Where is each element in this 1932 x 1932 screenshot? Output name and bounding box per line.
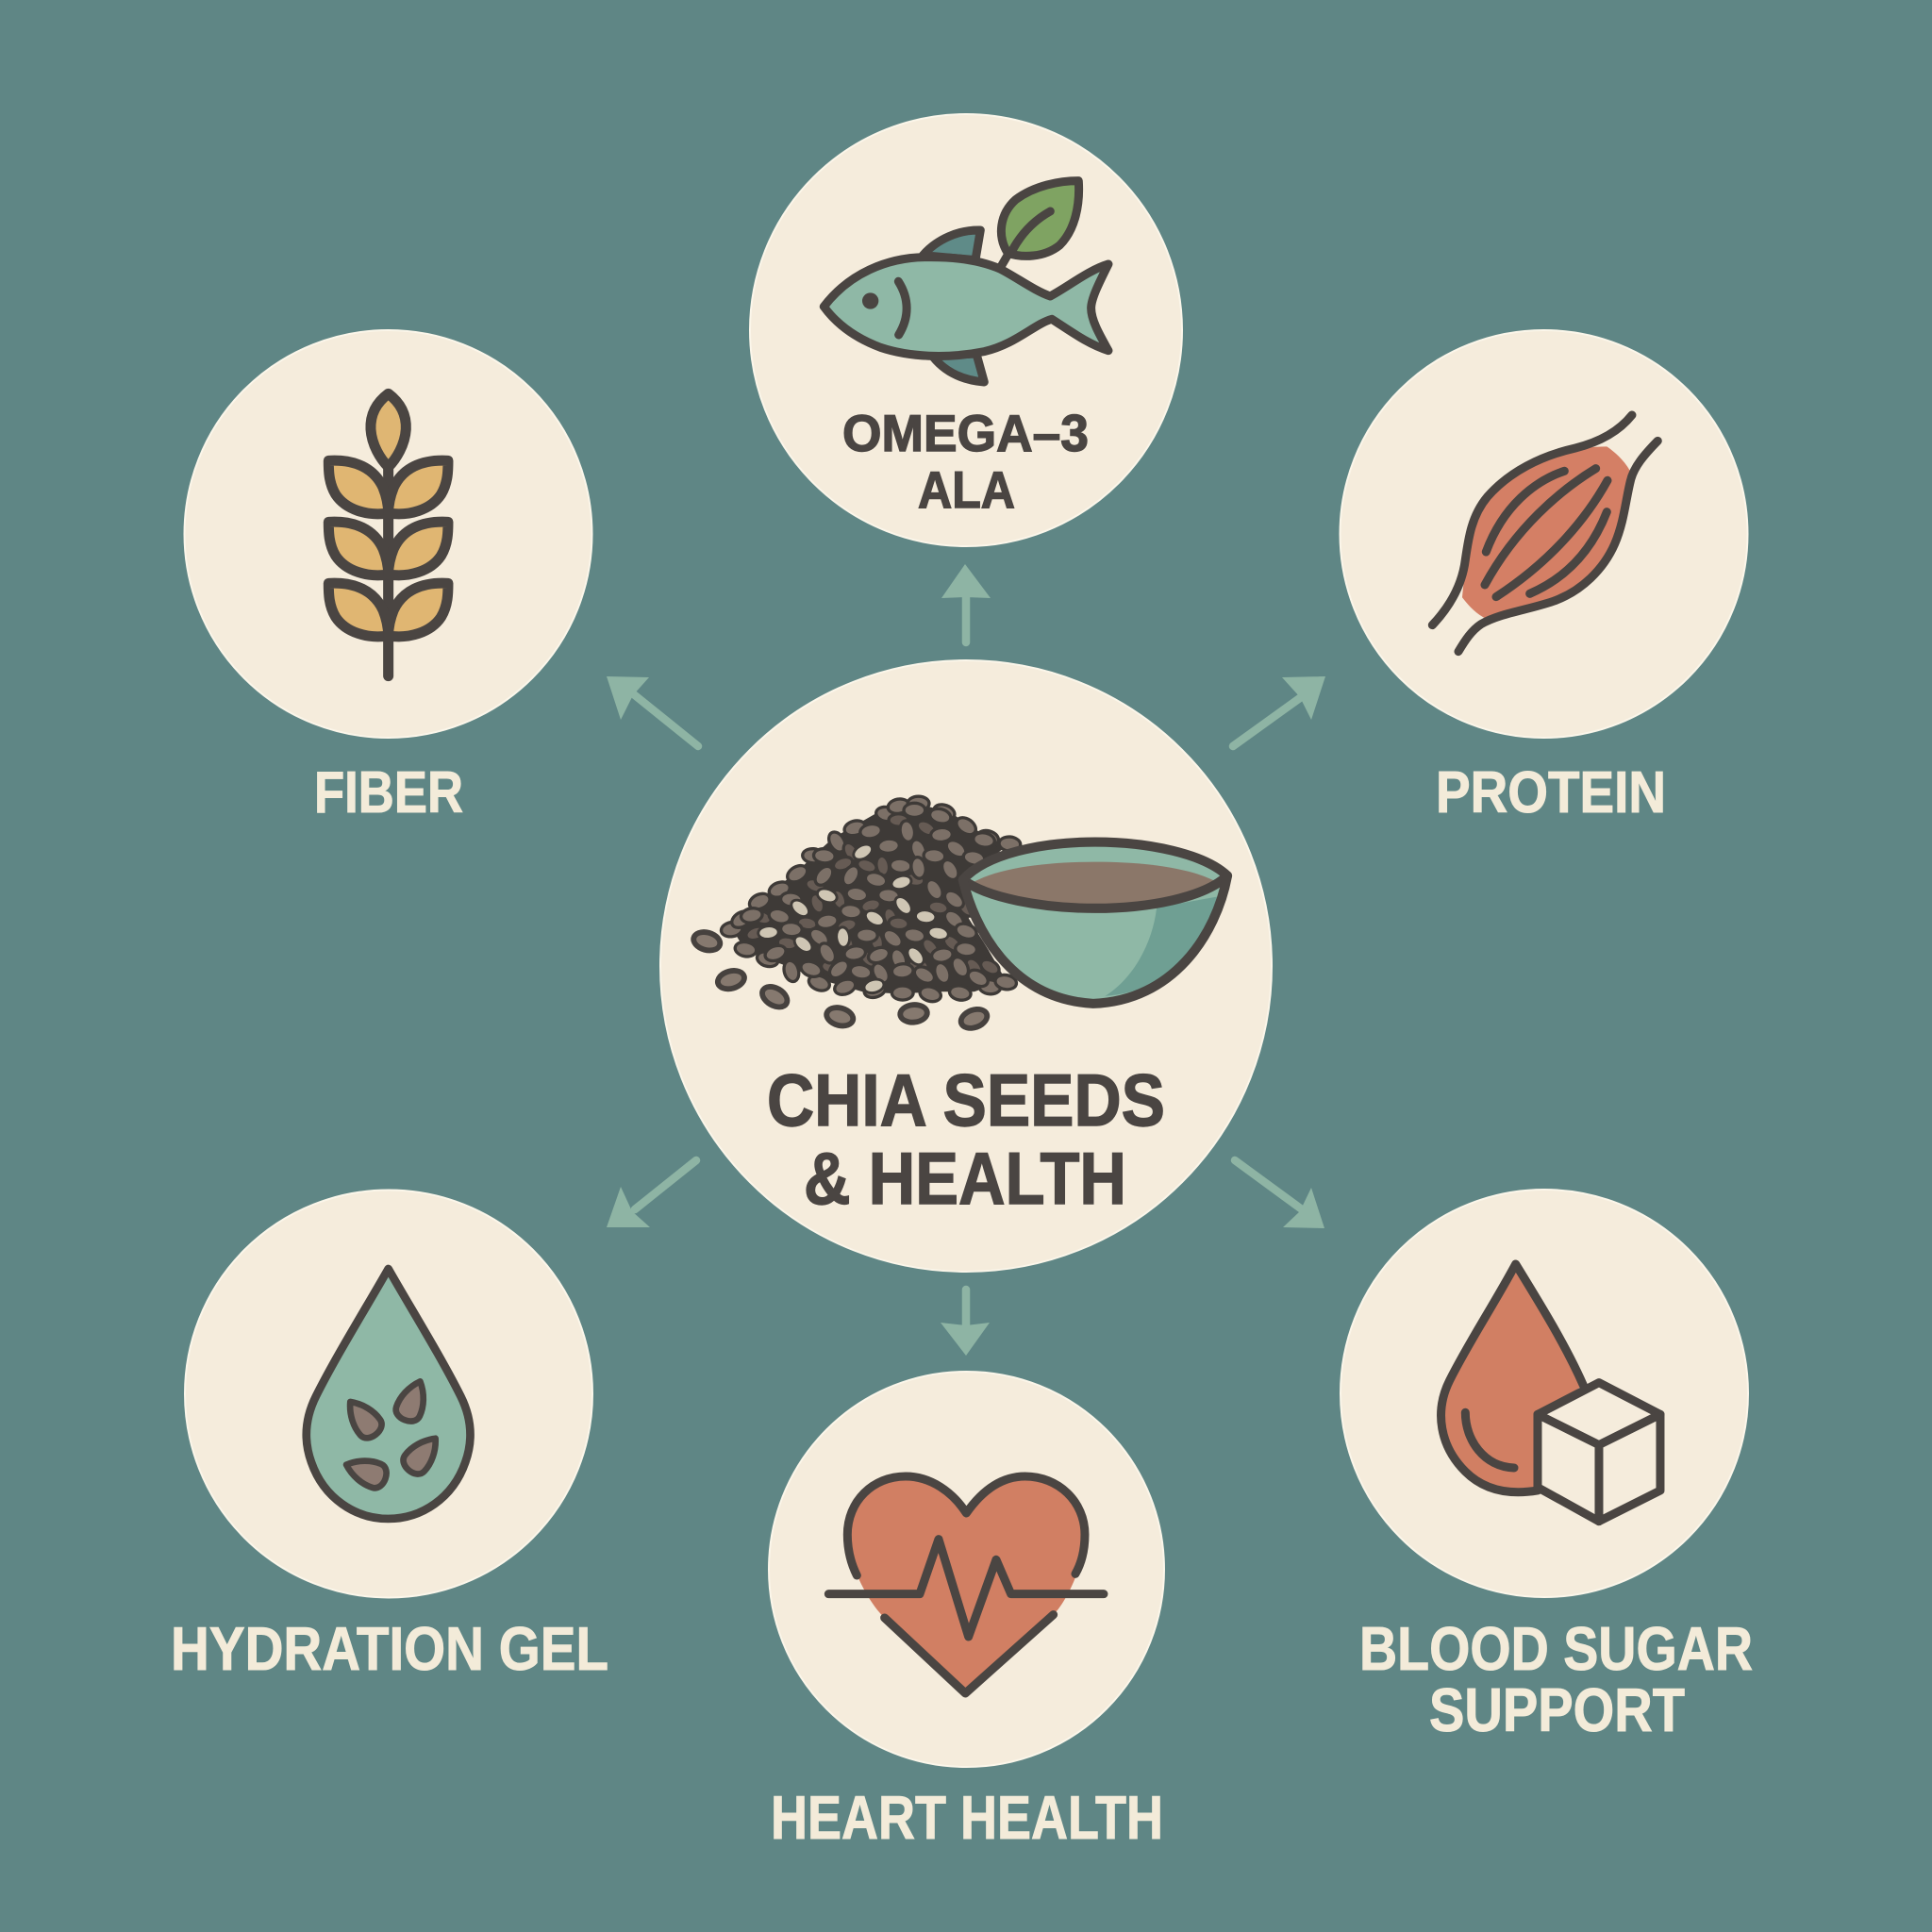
icon: fish with leaf [824, 181, 1108, 382]
icon: muscle [1432, 415, 1657, 652]
panel: protein [1340, 330, 1747, 738]
arrow: up-right to protein [1233, 676, 1325, 746]
label: omega-3 ALA: OMEGA–3 [842, 404, 1089, 462]
label: blood sugar support: SUPPORT [1429, 1675, 1685, 1744]
panel: center chia seeds and health [660, 660, 1272, 1272]
title: CHIA SEEDS [767, 1058, 1165, 1141]
label: protein: PROTEIN [1436, 760, 1666, 825]
arrow: down-left to hydration gel [607, 1160, 696, 1227]
panel: hydration gel [185, 1191, 592, 1598]
panel: fiber [185, 330, 592, 738]
icon: water drop with seeds [307, 1269, 471, 1519]
title [767, 1058, 1165, 1220]
label: fiber: FIBER [314, 760, 463, 825]
icon: wheat [328, 393, 448, 676]
label: blood sugar support [1359, 1614, 1753, 1744]
icon: heart with pulse [828, 1476, 1104, 1693]
arrow: down to heart health [941, 1290, 990, 1356]
panel: omega-3 ALA [750, 114, 1182, 546]
icon: chia seed pile [688, 794, 1023, 1035]
panel: blood sugar support [1341, 1190, 1748, 1597]
icon: blood drop and sugar cube [1441, 1264, 1660, 1522]
label: heart health: HEART HEALTH [771, 1783, 1163, 1852]
arrow: down-right to blood sugar [1235, 1160, 1324, 1228]
label: blood sugar support: BLOOD SUGAR [1359, 1614, 1753, 1683]
arrow: up-left to fiber [607, 676, 698, 746]
label: omega-3 ALA: ALA [918, 460, 1015, 519]
arrow: up to omega-3 [941, 564, 991, 642]
panel: heart health [769, 1372, 1164, 1767]
title: & HEALTH [804, 1137, 1126, 1220]
icon: bowl [963, 842, 1227, 1004]
label: omega-3 ALA [842, 404, 1089, 519]
label: hydration gel: HYDRATION GEL [171, 1614, 608, 1683]
